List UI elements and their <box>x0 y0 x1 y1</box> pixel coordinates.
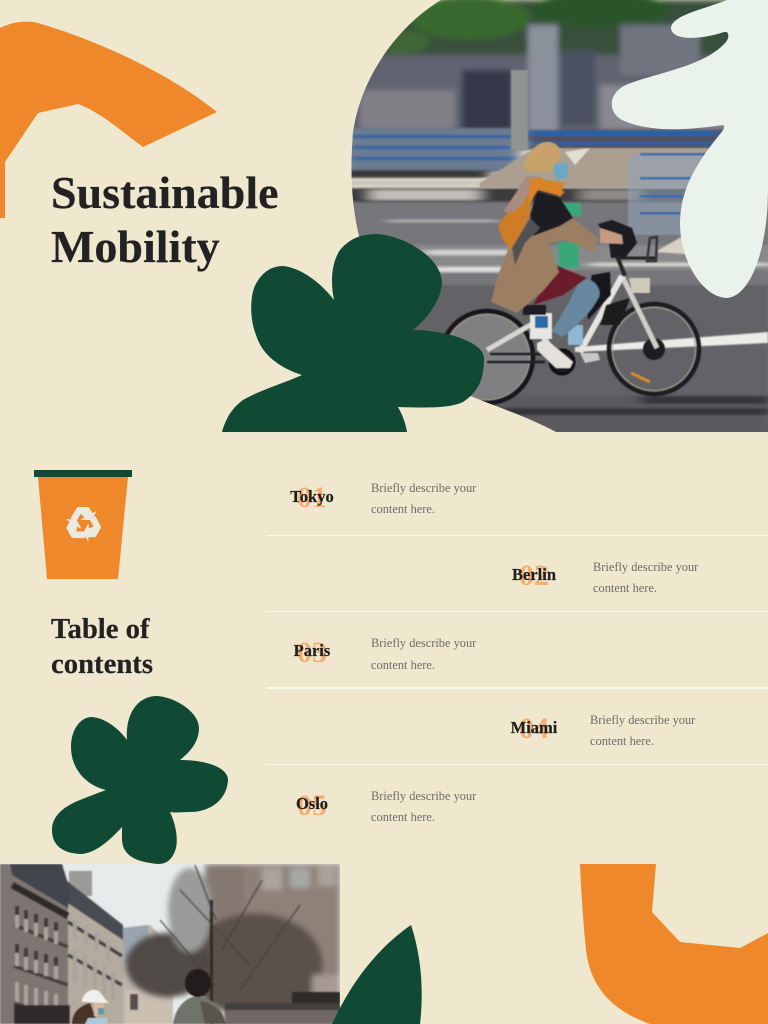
contents item 04 Miami: Miami <box>511 718 558 737</box>
scarf <box>498 177 565 255</box>
contents item 05 Oslo: content here. <box>371 810 435 824</box>
contents item 01 Tokyo: 01 <box>297 481 327 514</box>
contents item 05 Oslo: Oslo <box>296 794 328 813</box>
right hand building <box>67 904 123 1024</box>
decorative orange shape bottom right <box>580 864 768 1024</box>
rear wheel <box>441 311 533 403</box>
contents item 03 Paris: 03 <box>297 636 327 669</box>
front wheel <box>609 304 699 394</box>
black inner scarf <box>530 192 573 236</box>
contents item 02 Berlin: 02 <box>519 559 549 592</box>
woman <box>72 1003 98 1024</box>
photo: people on a Paris street <box>0 864 340 1024</box>
decorative small dark green flower <box>52 696 228 864</box>
tree and building behind <box>225 864 340 1024</box>
head <box>523 142 560 172</box>
contents item 02 Berlin: content here. <box>593 581 657 595</box>
title <box>51 167 279 272</box>
left hand building <box>0 864 68 1024</box>
contents item 03 Paris <box>294 636 477 672</box>
contents item 01 Tokyo <box>290 481 477 516</box>
bike frame <box>487 324 532 350</box>
contents item 05 Oslo <box>296 789 477 824</box>
contents item 03 Paris: Briefly describe your <box>371 636 477 650</box>
contents item 05 Oslo: Briefly describe your <box>371 789 477 803</box>
bags <box>586 272 611 320</box>
decorative light flower shape <box>612 0 768 298</box>
skirt <box>533 265 587 305</box>
contents item 04 Miami <box>511 712 696 748</box>
contents item 02 Berlin: Berlin <box>512 565 556 584</box>
contents item 04 Miami: content here. <box>590 734 654 748</box>
decorative dark green flower shape <box>222 234 484 432</box>
contents item 01 Tokyo: Briefly describe your <box>371 481 477 495</box>
title: Mobility <box>51 221 220 272</box>
handlebar and basket <box>598 220 637 258</box>
contents item 04 Miami: 04 <box>519 712 549 745</box>
contents item 03 Paris: content here. <box>371 658 435 672</box>
heading: table of contents: contents <box>51 648 153 680</box>
heading: table of contents <box>51 613 153 680</box>
shoe <box>537 339 573 368</box>
icon: recycling bin <box>34 470 132 579</box>
man <box>173 996 226 1024</box>
contents item 04 Miami: Briefly describe your <box>590 713 696 727</box>
title: Sustainable <box>51 167 279 218</box>
contents item 01 Tokyo: Tokyo <box>290 487 334 506</box>
row dividers <box>266 535 768 765</box>
coat <box>491 205 598 313</box>
contents item 02 Berlin: Briefly describe your <box>593 560 699 574</box>
chimney and far building <box>69 871 92 896</box>
contents item 03 Paris: Paris <box>294 641 331 660</box>
jeans <box>568 325 583 345</box>
heading: table of contents: Table of <box>51 613 150 645</box>
photo: cyclist on city street <box>340 0 768 435</box>
contents item 01 Tokyo: content here. <box>371 502 435 516</box>
contents item 05 Oslo: 05 <box>297 789 327 822</box>
decorative orange shape top left <box>0 22 217 218</box>
contents item 02 Berlin <box>512 559 699 595</box>
decorative dark green leaf <box>332 925 422 1024</box>
hand <box>600 228 623 244</box>
